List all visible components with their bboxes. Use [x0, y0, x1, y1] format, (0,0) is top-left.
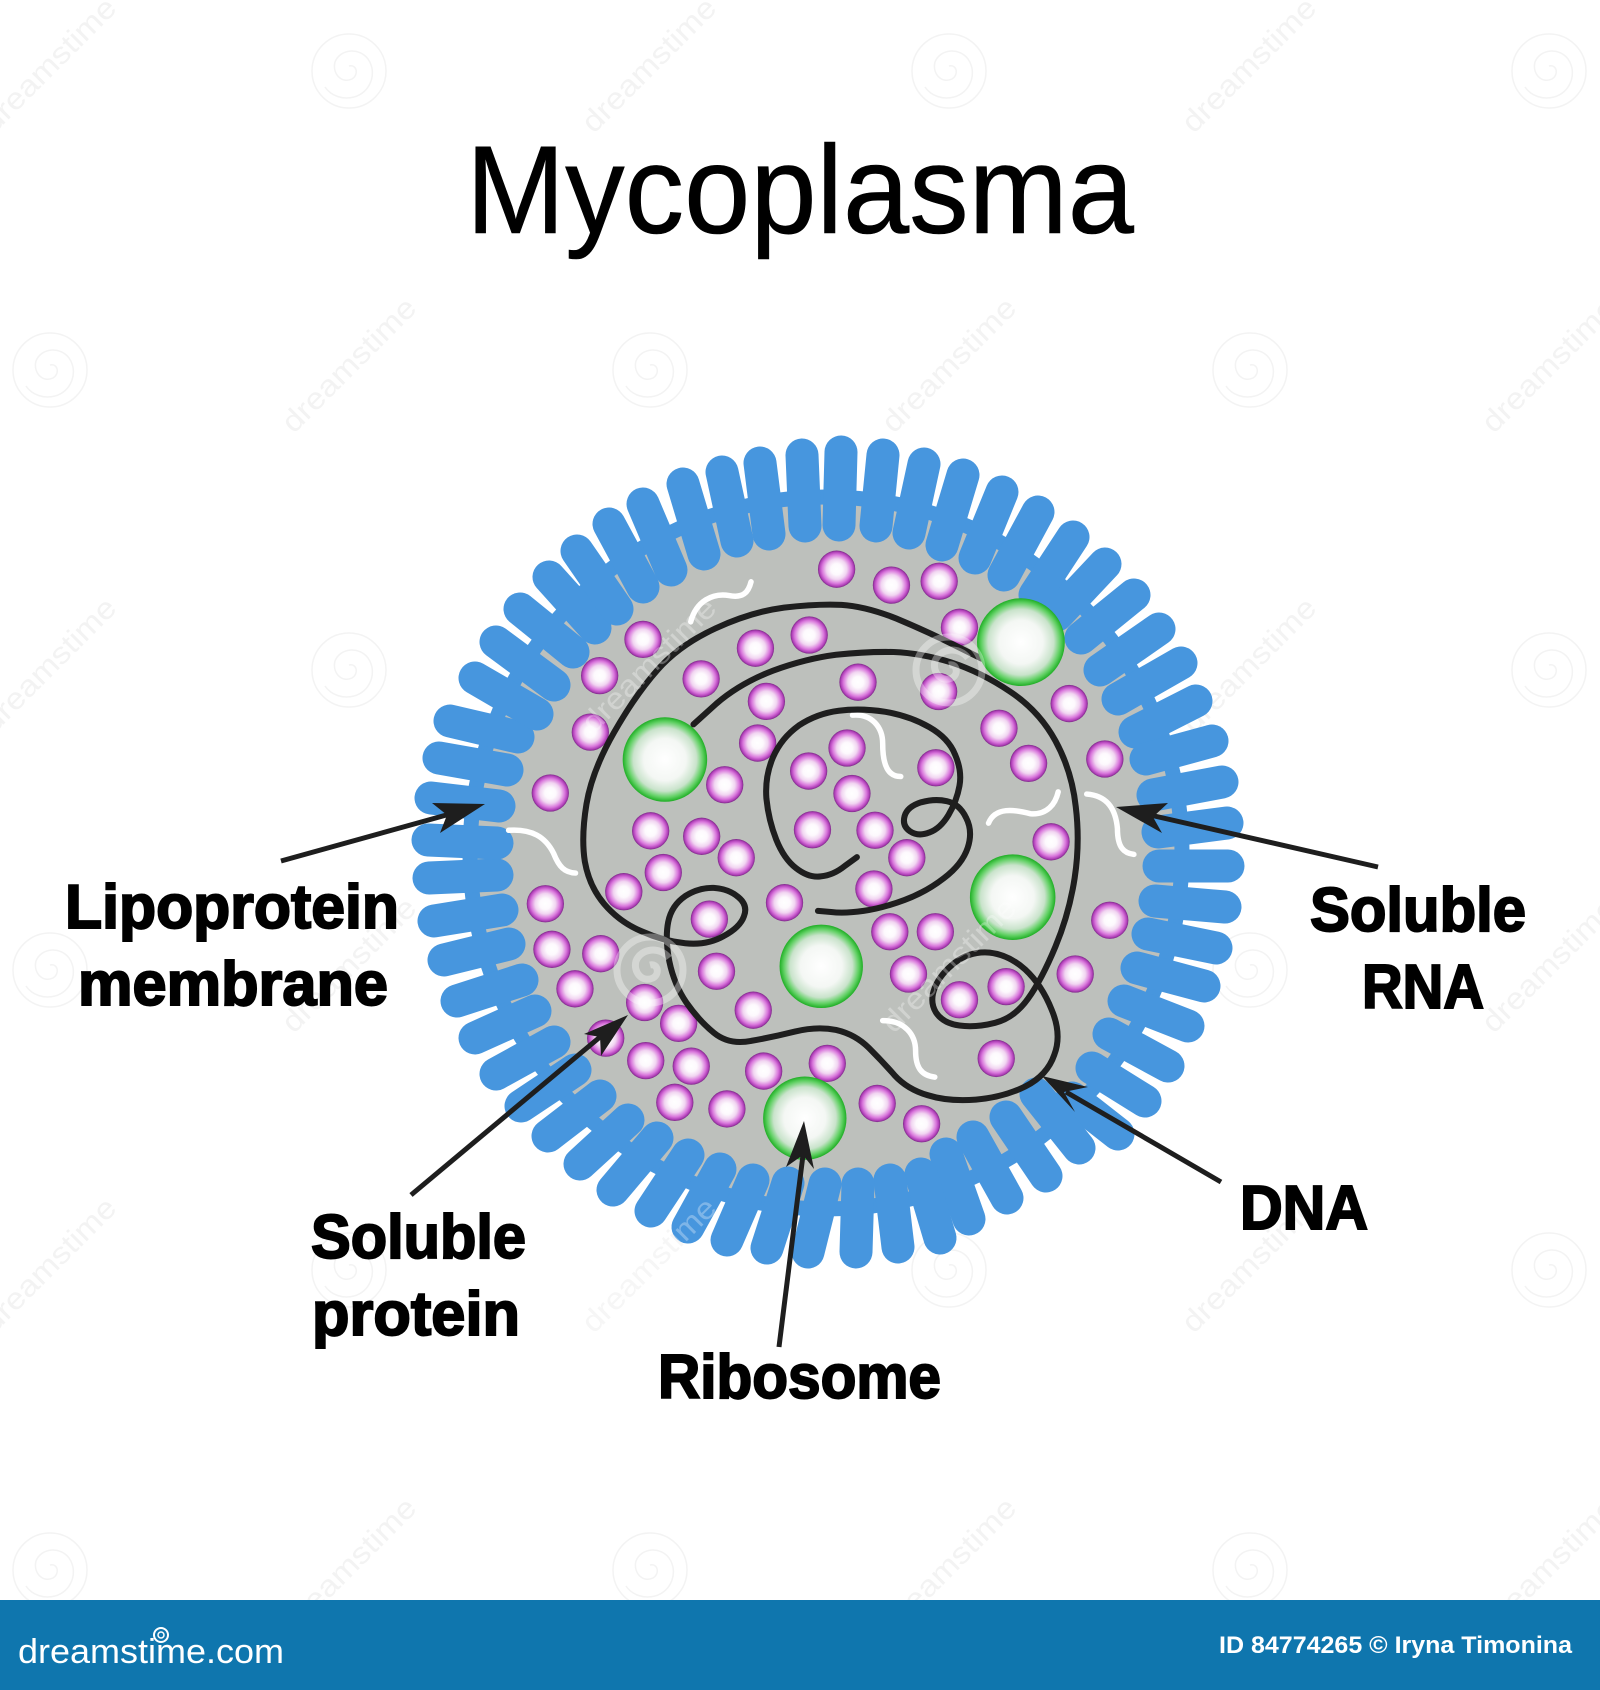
label: ribosome: Ribosome	[658, 1343, 941, 1412]
label: lipoprotein membrane	[65, 873, 399, 1019]
ribosomes	[623, 598, 1065, 1160]
arrow: soluble RNA	[1116, 803, 1378, 867]
label: soluble protein	[311, 1203, 526, 1349]
panel: mycoplasma cell	[428, 452, 1228, 1252]
label: DNA: DNA	[1240, 1174, 1368, 1243]
watermark overlay on artwork: dreamstime	[575, 591, 723, 739]
label: lipoprotein membrane: Lipoprotein	[65, 873, 399, 942]
watermark pattern (under artwork): dreamstime	[1175, 1191, 1323, 1339]
watermark pattern (under artwork): dreamstime	[875, 1491, 1023, 1639]
soluble proteins	[527, 551, 1128, 1142]
cytoplasm	[470, 497, 1182, 1209]
DNA strand	[583, 605, 1078, 1100]
label: soluble protein: protein	[312, 1280, 520, 1349]
label: soluble RNA: RNA	[1362, 953, 1484, 1022]
soluble RNA strands	[509, 582, 1134, 1077]
cell contents	[509, 551, 1134, 1160]
watermark pattern (under artwork): dreamstime	[1175, 591, 1323, 739]
lipoprotein membrane	[428, 452, 1228, 1252]
footer credit: ID 84774265 © Iryna Timonina	[1219, 1632, 1573, 1659]
watermark overlay on artwork	[575, 591, 1023, 1339]
label: lipoprotein membrane: membrane	[78, 950, 388, 1019]
label: soluble RNA: Soluble	[1310, 876, 1526, 945]
watermark overlay on artwork: dreamstime	[575, 1191, 723, 1339]
arrow: ribosome	[779, 1121, 814, 1347]
watermark pattern (under artwork): dreamstime	[1175, 0, 1323, 139]
watermark pattern (under artwork): dreamstime	[875, 291, 1023, 439]
watermark pattern (under artwork): dreamstime	[575, 0, 723, 139]
title: Mycoplasma	[466, 121, 1134, 260]
footer bar	[0, 1600, 1600, 1690]
arrow: soluble protein	[411, 1015, 628, 1195]
watermark pattern (under artwork): dreamstime	[575, 1191, 723, 1339]
watermark pattern (under artwork): dreamstime	[275, 1491, 423, 1639]
watermark overlay on artwork: dreamstime	[875, 891, 1023, 1039]
label: soluble RNA	[1310, 876, 1526, 1022]
watermark pattern (under artwork): dreamstime	[275, 291, 423, 439]
footer logo: dreamstime.com	[18, 1633, 284, 1671]
arrow: DNA	[1042, 1076, 1221, 1182]
label: soluble protein: Soluble	[311, 1203, 526, 1272]
arrow: lipoprotein membrane	[281, 803, 485, 861]
watermark pattern (under artwork): dreamstime	[275, 891, 423, 1039]
